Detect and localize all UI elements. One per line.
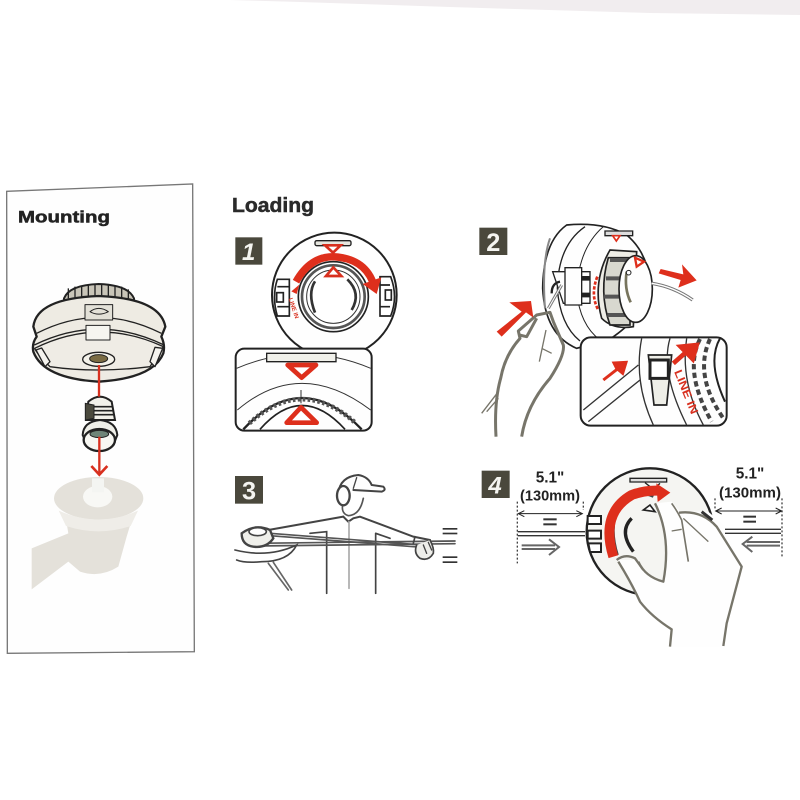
badge: step 3	[235, 476, 263, 506]
badge: step 4: 4	[487, 472, 502, 499]
dimension: left 5.1 inch: 5.1"	[536, 470, 564, 487]
step 3	[235, 475, 457, 593]
panel: mounting	[7, 184, 194, 653]
hand	[618, 502, 742, 647]
icon: spool top view	[272, 233, 397, 357]
badge: step 2: 2	[486, 229, 500, 257]
dimension: right 5.1 inch: (130mm)	[719, 486, 781, 502]
badge: step 1: 1	[242, 239, 255, 266]
red marks	[325, 245, 341, 253]
heading: loading: Loading	[232, 195, 314, 217]
arrow: push line in	[497, 301, 533, 337]
badge: step 1	[235, 237, 262, 266]
spool	[33, 284, 165, 382]
badge: step 4	[482, 471, 510, 499]
arrow: inward from left	[522, 539, 559, 555]
icon: spool top view: LINE IN	[287, 297, 299, 320]
arrow: inset small	[603, 362, 626, 380]
step 4	[482, 465, 782, 647]
badge: step 2	[479, 228, 507, 257]
inset: line-in close-up	[581, 337, 727, 426]
shaft housing	[32, 477, 143, 589]
icon: spool with line fed through	[543, 224, 693, 348]
inset: line-in close-up: LINE IN	[671, 368, 700, 416]
icon: person measuring line	[235, 475, 455, 593]
arrow: inward from right	[743, 537, 780, 552]
icon: trimmer head mounted on shaft	[32, 284, 165, 589]
step 1	[235, 233, 397, 431]
icon: alignment close-up	[236, 349, 372, 431]
badge: step 3: 3	[242, 478, 256, 506]
dimension: left 5.1 inch	[517, 470, 585, 563]
arrow: pull line out	[659, 264, 697, 288]
dimension: right 5.1 inch	[715, 465, 782, 558]
dimension: right 5.1 inch: 5.1"	[736, 465, 764, 482]
heading: mounting: Mounting	[18, 208, 110, 227]
symbol: equals marks	[443, 528, 457, 563]
arrow: inset line-in	[673, 345, 697, 363]
icon: hand holding line	[482, 312, 563, 437]
icon: spool and hand winding	[587, 468, 742, 647]
dimension: left 5.1 inch: (130mm)	[520, 489, 580, 505]
adapter nut	[83, 397, 117, 451]
step 2	[479, 224, 727, 437]
arrow: fit down onto shaft	[91, 365, 107, 475]
